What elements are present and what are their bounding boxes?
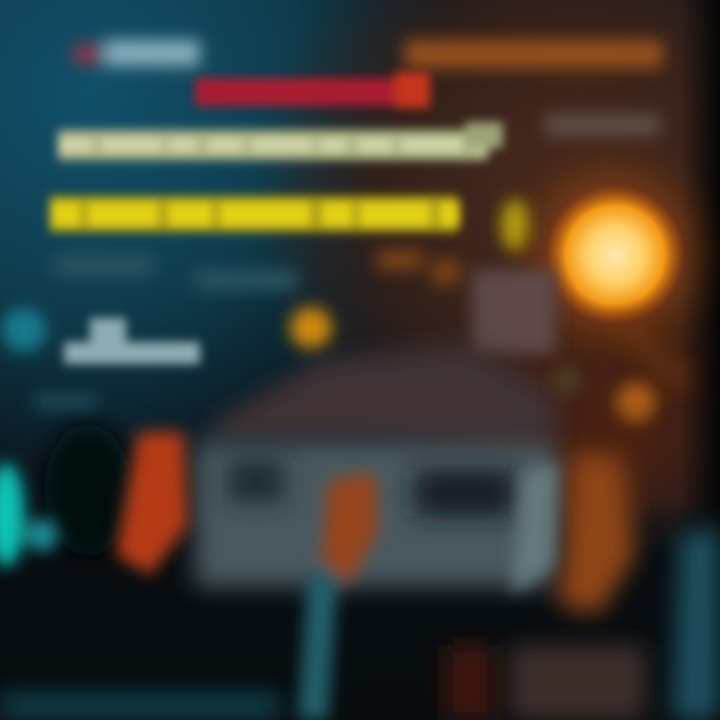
orange ray from sun (626, 332, 698, 393)
pale label text (64, 318, 200, 364)
orange header bar (405, 40, 663, 68)
header brand label (74, 40, 200, 66)
subtext blocks (55, 255, 297, 290)
reddish figure bottom center (445, 645, 495, 720)
pale headline line (58, 122, 503, 160)
building windows (228, 460, 515, 516)
cyan glow left (0, 463, 58, 567)
pink-grey panel (472, 270, 556, 354)
teal floor strip (0, 692, 280, 720)
building roof (210, 345, 555, 440)
yellow headline line (50, 196, 460, 232)
yellow mark (501, 199, 529, 251)
orange lights right (552, 366, 656, 422)
teal figure far right (672, 525, 720, 720)
center person (298, 472, 378, 720)
red title bar (195, 72, 430, 108)
teal logo blob (2, 308, 46, 352)
person left with orange jacket (44, 424, 188, 575)
glowing sun (533, 173, 697, 337)
amber text under headline (378, 250, 460, 284)
building body (195, 442, 555, 587)
person right (510, 452, 645, 720)
right column grey text (545, 114, 660, 136)
small caption (35, 394, 97, 410)
orange dot (290, 307, 332, 349)
